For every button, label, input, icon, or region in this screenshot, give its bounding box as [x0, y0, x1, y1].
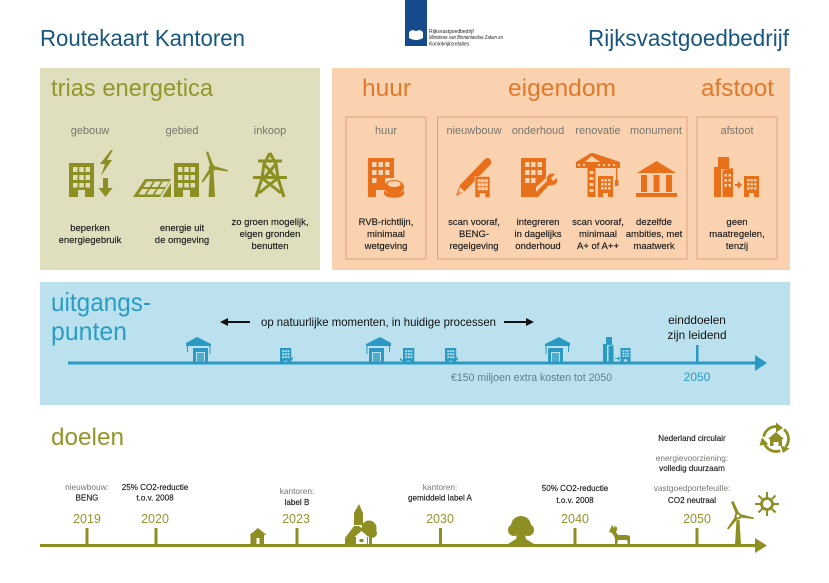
- label: renovatie: renovatie: [575, 125, 621, 137]
- milestone: 2050: 2050: [683, 512, 711, 526]
- milestone: 2030: [408, 482, 473, 545]
- logo: Rijksoverheid: Ministerie van Binnenlandse Zaken en: [429, 35, 503, 41]
- heading: eigendom: eigendom: [508, 75, 616, 102]
- icon: small building: [445, 348, 458, 364]
- milestone: 2020: t.o.v. 2008: [136, 494, 174, 502]
- icon: afstoot building: [603, 337, 631, 362]
- icon: tree: [508, 516, 534, 544]
- text: extra kosten: €150 miljoen extra kosten tot 2050: [451, 372, 612, 384]
- text: scan vooraf BENG: BENG-: [459, 229, 489, 240]
- milestone: 2020: 2020: [141, 512, 169, 526]
- milestone: 2040: [542, 484, 609, 545]
- text: zo groen mogelijk: zo groen mogelijk,: [231, 217, 309, 228]
- milestone: 2030: gemiddeld label A: [408, 494, 473, 502]
- heading: trias energetica: trias energetica: [51, 75, 214, 102]
- heading: huur: huur: [362, 75, 411, 102]
- milestone: 2019: [65, 482, 109, 545]
- timeline: [40, 538, 767, 553]
- milestone: 2023: [280, 486, 314, 545]
- icon: monument temple: [636, 161, 677, 197]
- text: zo groen mogelijk: benutten: [252, 241, 288, 252]
- title: Routekaart Kantoren: Routekaart Kantoren: [40, 25, 245, 51]
- text: dezelfde ambities: ambities, met: [626, 229, 683, 240]
- icon: sun: [755, 492, 779, 516]
- icon: wind turbine: [727, 501, 754, 545]
- milestone: 2023: 2023: [282, 512, 310, 526]
- text: beperken energiegebruik: beperken: [70, 223, 110, 234]
- text: RVB-richtlijn: wetgeving: [364, 241, 407, 252]
- text: scan vooraf BENG: regelgeving: [449, 241, 499, 252]
- milestone: 2050: [654, 434, 730, 545]
- logo: Rijksoverheid: Rijksvastgoedbedrijf: [429, 29, 474, 35]
- icon: crane mirrored: [545, 337, 570, 362]
- icon: building with wrench: [521, 158, 557, 197]
- text: op natuurlijke momenten: op natuurlijke momenten, in huidige processen: [261, 315, 496, 329]
- heading: doelen: doelen: [51, 424, 124, 451]
- text: einddoelen zijn leidend: einddoelen: [668, 313, 726, 327]
- milestone: 2040: 2040: [561, 512, 589, 526]
- text: geen maatregelen: geen: [726, 217, 748, 228]
- heading: afstoot: afstoot: [701, 75, 774, 102]
- text: integreren in dagelijks onderhoud: in dagelijks: [514, 229, 562, 240]
- box: afstoot: [697, 117, 777, 259]
- milestone: 2030: 2030: [426, 512, 454, 526]
- icon: deer: [609, 525, 630, 545]
- text: geen maatregelen: maatregelen,: [709, 229, 765, 240]
- arrow: right: [504, 318, 534, 326]
- text: dezelfde ambities: maatwerk: [633, 241, 675, 252]
- milestone: 2019: BENG: [76, 494, 98, 502]
- icon: small building: [280, 348, 293, 364]
- text: zo groen mogelijk: eigen gronden: [240, 229, 300, 240]
- text: RVB-richtlijn: minimaal: [367, 229, 405, 240]
- heading: uitgangspunten: uitgangs-: [51, 287, 151, 317]
- icon: crane: [186, 337, 211, 362]
- text: RVB-richtlijn: RVB-richtlijn,: [359, 217, 413, 228]
- milestone: 2023: label B: [285, 498, 309, 507]
- icon: building with reduced energy: [69, 150, 113, 197]
- logo: Rijksoverheid: Koninkrijksrelaties: [429, 42, 470, 48]
- milestone: 2050: Nederland circulair: [658, 434, 726, 443]
- milestone: 2019: 2019: [73, 512, 101, 526]
- box: huur: [346, 117, 426, 259]
- icon: tall building moving to small building: [714, 157, 759, 197]
- label: afstoot: afstoot: [720, 125, 754, 137]
- milestone: 2050: vastgoedportefeuille:: [654, 483, 730, 493]
- milestone: 2030: kantoren:: [423, 482, 457, 492]
- text: dezelfde ambities: dezelfde: [636, 217, 672, 228]
- text: integreren in dagelijks onderhoud: integreren: [517, 217, 559, 228]
- icon: crane mirrored: [366, 337, 391, 362]
- icon: church with tree: [345, 504, 377, 544]
- box: eigendom: [438, 117, 687, 259]
- icon: recycling house: [760, 422, 790, 453]
- arrow: left: [220, 318, 250, 326]
- label: huur: huur: [375, 125, 397, 137]
- milestone: 2019: nieuwbouw:: [65, 482, 109, 492]
- panel: trias energetica: [40, 68, 320, 270]
- milestone: 2050: CO2 neutraal: [668, 496, 716, 505]
- text: energie uit de omgeving: energie uit: [160, 223, 205, 234]
- label: nieuwbouw: nieuwbouw: [446, 125, 502, 137]
- icon: electricity pylon: [253, 153, 287, 197]
- milestone: 2050: energievoorziening:: [656, 453, 728, 463]
- section: doelen: [40, 422, 790, 553]
- milestone: 2020: [122, 483, 189, 545]
- label: onderhoud: onderhoud: [512, 125, 564, 137]
- timeline: [68, 355, 767, 371]
- icon: building with coins: [368, 158, 404, 198]
- heading: Rijksvastgoedbedrijf: Rijksvastgoedbedrijf: [588, 25, 790, 51]
- icon: solar panel, building and wind turbine: [133, 152, 228, 197]
- milestone: 2050: volledig duurzaam: [659, 464, 725, 473]
- milestone: 2020: 25% CO2-reductie: [122, 483, 189, 492]
- text: energie uit de omgeving: de omgeving: [155, 235, 209, 246]
- label: gebied: gebied: [165, 125, 199, 137]
- icon: small building: [400, 348, 414, 364]
- heading: uitgangspunten: punten: [51, 316, 127, 346]
- text: scan vooraf minimaal: scan vooraf,: [572, 217, 624, 228]
- milestone: 2040: 50% CO2-reductie: [542, 484, 609, 493]
- icon: pencil and new building: [456, 158, 491, 198]
- logo: Rijksoverheid: [405, 0, 503, 48]
- year: 2050: 2050: [684, 370, 711, 384]
- text: integreren in dagelijks onderhoud: onderhoud: [515, 241, 561, 252]
- milestone: 2023: kantoren:: [280, 486, 314, 496]
- text: beperken energiegebruik: energiegebruik: [59, 235, 122, 246]
- label: monument: monument: [630, 125, 682, 137]
- text: scan vooraf minimaal: A+ of A++: [577, 241, 619, 252]
- label: inkoop: inkoop: [254, 125, 286, 137]
- text: scan vooraf BENG: scan vooraf,: [448, 217, 500, 228]
- label: gebouw: gebouw: [71, 125, 109, 137]
- text: einddoelen zijn leidend: zijn leidend: [667, 328, 727, 342]
- text: scan vooraf minimaal: minimaal: [579, 229, 617, 240]
- milestone: 2040: t.o.v. 2008: [556, 496, 594, 505]
- icon: house: [250, 528, 266, 544]
- panel: uitgangspunten: [40, 282, 790, 405]
- tick: 2050: [696, 345, 698, 362]
- text: geen maatregelen: tenzij: [726, 241, 748, 252]
- icon: construction crane with building: [576, 153, 620, 197]
- panel: huur eigendom afstoot: [332, 68, 790, 270]
